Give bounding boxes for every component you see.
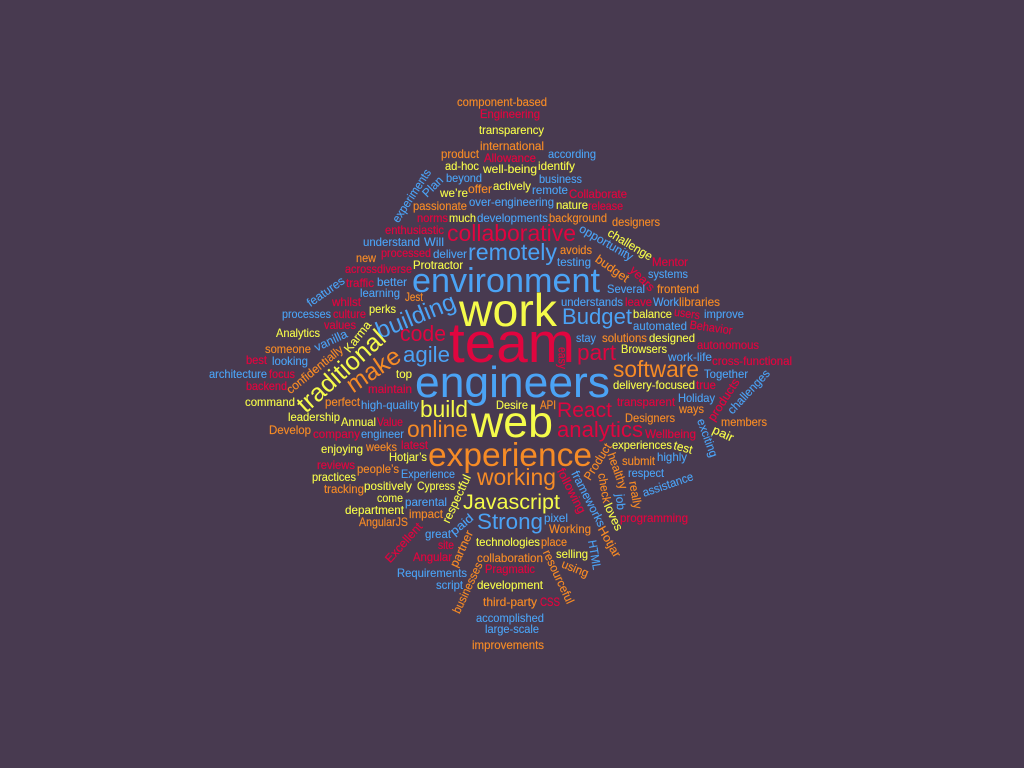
small words: orange: third-party xyxy=(483,595,537,609)
small words: orange: Working xyxy=(549,522,591,536)
small words: blue: testing xyxy=(557,255,591,269)
small words: orange: component-based xyxy=(457,95,547,109)
large word: agile: agile xyxy=(403,342,450,367)
small words: blue: beyond xyxy=(446,171,482,185)
small words: yellow: positively xyxy=(364,479,412,493)
small words: yellow: respectful xyxy=(439,472,474,525)
small words: orange: businesses xyxy=(450,560,486,616)
large word: working: working xyxy=(476,464,556,490)
small words: red: best xyxy=(246,353,268,367)
small words: orange: improvements xyxy=(472,638,544,652)
small words: blue: over-engineering xyxy=(469,195,554,209)
large word: online: online xyxy=(407,416,468,442)
small words: yellow: Browsers xyxy=(621,342,667,356)
small words: orange: Designers xyxy=(625,411,675,425)
small words: blue: assistance xyxy=(641,469,695,500)
small words: red: culture xyxy=(333,307,366,321)
small words: yellow: ad-hoc xyxy=(445,159,479,173)
small words: yellow: we’re xyxy=(439,186,468,200)
small words: yellow: test xyxy=(672,438,695,457)
large word: environment: environment xyxy=(412,262,601,300)
small words: red: Mentor xyxy=(652,255,688,269)
small words: yellow: Protractor xyxy=(413,258,463,272)
small words: blue: challenges xyxy=(724,366,773,417)
large word: React: React xyxy=(557,398,612,422)
small words: yellow: nature xyxy=(556,198,588,212)
small words: red: users xyxy=(673,305,701,322)
small words: red: transparent xyxy=(617,395,676,409)
small words: yellow: Cypress xyxy=(417,479,455,493)
small words: red: easy xyxy=(556,347,570,369)
small words: yellow: top xyxy=(396,367,412,381)
small words: red: years xyxy=(627,263,658,294)
small words: red: Collaborate xyxy=(569,187,627,201)
small words: blue: systems xyxy=(648,267,688,281)
small words: red: true xyxy=(696,378,716,392)
large word: code: code xyxy=(400,321,446,346)
small words: blue: opportunity xyxy=(577,222,636,264)
small words: blue: Together xyxy=(704,367,748,381)
small words: yellow: come xyxy=(377,491,403,505)
small words: orange: avoids xyxy=(560,243,592,257)
small words: orange: Hotjar xyxy=(595,524,624,560)
small words: orange: international xyxy=(480,139,544,153)
small words: blue: developments xyxy=(477,211,548,225)
small words: orange: background xyxy=(549,211,607,225)
small words: blue: Plan xyxy=(419,173,446,200)
small words: blue: better xyxy=(377,275,407,289)
small words: yellow: identify xyxy=(538,159,575,173)
small words: yellow: delivery-focused xyxy=(613,378,695,392)
small words: red: Behavior xyxy=(689,318,733,337)
small words: blue: architecture xyxy=(209,367,267,381)
large word: experience: experience xyxy=(428,436,592,473)
small words: red: programming xyxy=(620,511,688,525)
small words: orange: designers xyxy=(612,215,660,229)
small words: orange: healthy xyxy=(604,451,631,491)
small words: orange: Develop xyxy=(269,423,311,437)
small words: orange: members xyxy=(721,415,767,429)
large word: engineers: engineers xyxy=(415,358,610,407)
small words: orange: someone xyxy=(265,342,311,356)
small words: red: whilst xyxy=(331,295,362,309)
small words: blue: HTML xyxy=(585,539,604,571)
small words: blue: Will xyxy=(424,235,444,249)
small words: blue: work-life xyxy=(667,350,712,364)
small words: yellow: Karma xyxy=(341,318,374,355)
small words: orange: ways xyxy=(678,402,704,416)
small words: orange: check xyxy=(595,472,614,505)
small words: red: Pragmatic xyxy=(485,562,535,576)
large word: analytics: analytics xyxy=(557,417,643,442)
small words: red: focus xyxy=(269,367,295,381)
small words: yellow: challenge xyxy=(605,226,656,264)
small words: orange: impact xyxy=(409,507,444,521)
large word: traditional: traditional xyxy=(291,324,392,418)
small words: blue: deliver xyxy=(433,247,467,261)
small words: blue: paid xyxy=(447,511,476,538)
small words: orange: Product xyxy=(581,440,615,483)
small words: yellow: designed xyxy=(649,331,695,345)
small words: orange: solutions xyxy=(602,331,647,345)
small words: orange: frontend xyxy=(657,282,699,296)
small words: red: reviews xyxy=(317,458,355,472)
small words: blue: automated xyxy=(633,319,687,333)
small words: orange: really xyxy=(626,480,645,510)
small words: orange: people’s xyxy=(357,462,399,476)
small words: red: norms xyxy=(417,211,448,225)
small words: red: CSS xyxy=(540,595,560,609)
small words: yellow: Desire xyxy=(496,398,528,412)
small words: orange: place xyxy=(541,535,567,549)
small words: blue: Several xyxy=(607,282,645,296)
small words: blue: vanilla xyxy=(312,327,350,354)
small words: blue: according xyxy=(548,147,596,161)
small words: blue: engineer xyxy=(361,427,404,441)
small words: orange: Jest xyxy=(405,290,424,304)
small words: blue: respect xyxy=(628,466,665,480)
small words: red: backend xyxy=(246,379,287,393)
large word: part: part xyxy=(577,340,617,365)
small words: yellow: enjoying xyxy=(321,442,363,456)
small words: blue: Work xyxy=(653,295,680,309)
small words: red: cross-functional xyxy=(712,354,792,368)
small words: red: latest xyxy=(401,438,429,452)
small words: blue: Requirements xyxy=(397,566,467,580)
small words: orange xyxy=(265,95,767,652)
small words: blue: processes xyxy=(282,307,331,321)
large word: Budget: Budget xyxy=(562,304,632,329)
small words: blue: learning xyxy=(360,286,400,300)
large word: remotely: remotely xyxy=(468,239,557,265)
small words: red: company xyxy=(313,427,360,441)
small words: orange: API xyxy=(540,398,556,412)
small words: blue: frameworks xyxy=(568,468,609,529)
large word: Strong: Strong xyxy=(477,509,543,534)
small words: red: Angular xyxy=(413,550,452,564)
small words: red: leave xyxy=(625,295,652,309)
small words: blue: highly xyxy=(657,450,687,464)
small words: yellow: transparency xyxy=(479,123,544,137)
small words: yellow xyxy=(245,123,736,592)
small words: yellow: perks xyxy=(369,302,396,316)
small words: red: products xyxy=(705,376,743,424)
small words: yellow: selling xyxy=(556,547,588,561)
small words: yellow: leadership xyxy=(288,410,340,424)
large word: web: web xyxy=(470,398,553,447)
small words: orange: collaboration xyxy=(477,551,543,565)
small words: yellow: practices xyxy=(312,470,356,484)
small words: orange: new xyxy=(356,251,376,265)
small words: orange: perfect xyxy=(325,395,361,409)
small words: orange: partner xyxy=(447,528,476,569)
small words: yellow: command xyxy=(245,395,295,409)
small words: yellow: actively xyxy=(493,179,531,193)
small words: yellow: pair xyxy=(710,423,736,445)
small words: red: Wellbeing xyxy=(645,427,696,441)
small words: blue: great xyxy=(425,527,452,541)
small words: blue: high-quality xyxy=(361,398,419,412)
small words: orange: passionate xyxy=(413,199,467,213)
small words: red xyxy=(246,107,792,609)
small words: red: traffic xyxy=(346,276,374,290)
large word: team: team xyxy=(449,311,575,375)
large word: Javascript: Javascript xyxy=(463,490,560,514)
small words: yellow: balance xyxy=(633,307,672,321)
small words: red: values xyxy=(324,318,356,332)
small words: blue: job xyxy=(613,492,628,511)
large word: software: software xyxy=(613,356,699,382)
small words: red: following xyxy=(554,466,589,516)
small words: blue: business xyxy=(539,172,582,186)
large word: building: building xyxy=(372,288,460,345)
small words: yellow: much xyxy=(449,211,476,225)
small words: orange: tracking xyxy=(324,482,364,496)
small words: blue: parental xyxy=(405,495,447,509)
small words: yellow: technologies xyxy=(476,535,540,549)
small words: blue: script xyxy=(436,578,464,592)
small words: orange: using xyxy=(560,557,591,580)
small words: blue: exciting xyxy=(694,417,721,459)
small words: yellow: Hotjar’s xyxy=(389,450,427,464)
small words: blue: stay xyxy=(576,331,596,345)
small words: yellow: development xyxy=(477,578,544,592)
small words: blue xyxy=(209,147,773,636)
small words: blue: features xyxy=(304,274,347,310)
small words: orange: budget xyxy=(593,252,632,286)
small words: blue: pixel xyxy=(544,511,568,525)
small words: red: processed xyxy=(381,246,431,260)
small words: yellow: loves xyxy=(601,501,626,533)
small words: blue: understands xyxy=(561,295,623,309)
small words: red: enthusiastic xyxy=(385,223,444,237)
small words: blue: Holiday xyxy=(678,391,715,405)
small words: yellow: well-being xyxy=(482,162,537,176)
small words: blue: remote xyxy=(532,183,568,197)
small words: red: site xyxy=(438,538,454,552)
small words: red: Engineering xyxy=(480,107,540,121)
small words: red: acrossdiverse xyxy=(345,262,412,276)
small words: red: Excellent xyxy=(382,519,426,566)
small words: red: autonomous xyxy=(697,338,759,352)
small words: orange: submit xyxy=(622,454,656,468)
small words: red: Allowance xyxy=(484,151,536,165)
small words: orange: weeks xyxy=(365,440,397,454)
large word: collaborative: collaborative xyxy=(447,220,576,246)
small words: blue: improve xyxy=(704,307,744,321)
small words: blue: experiments xyxy=(389,166,434,225)
small words: orange: resourceful xyxy=(540,548,577,606)
small words: orange: AngularJS xyxy=(359,515,408,529)
small words: yellow: Annual xyxy=(341,415,376,429)
large word: work: work xyxy=(458,284,558,336)
large word: make: make xyxy=(341,343,406,399)
small words: yellow: experiences xyxy=(612,438,672,452)
small words: yellow: Analytics xyxy=(276,326,320,340)
small words: red: release xyxy=(588,199,623,213)
small words: red: Value xyxy=(377,415,403,429)
small words: blue: Experience xyxy=(401,467,455,481)
small words: blue: large-scale xyxy=(485,622,539,636)
small words: blue: understand xyxy=(363,235,420,249)
small words: yellow: department xyxy=(345,503,405,517)
large word: build: build xyxy=(420,396,468,422)
small words: orange: product xyxy=(441,147,480,161)
small words: orange: libraries xyxy=(679,295,720,309)
small words: red: maintain xyxy=(368,382,412,396)
small words: orange: offer xyxy=(468,182,492,196)
small words: blue: looking xyxy=(272,354,308,368)
small words: blue: accomplished xyxy=(476,611,544,625)
small words: orange: confidentially xyxy=(283,342,346,397)
